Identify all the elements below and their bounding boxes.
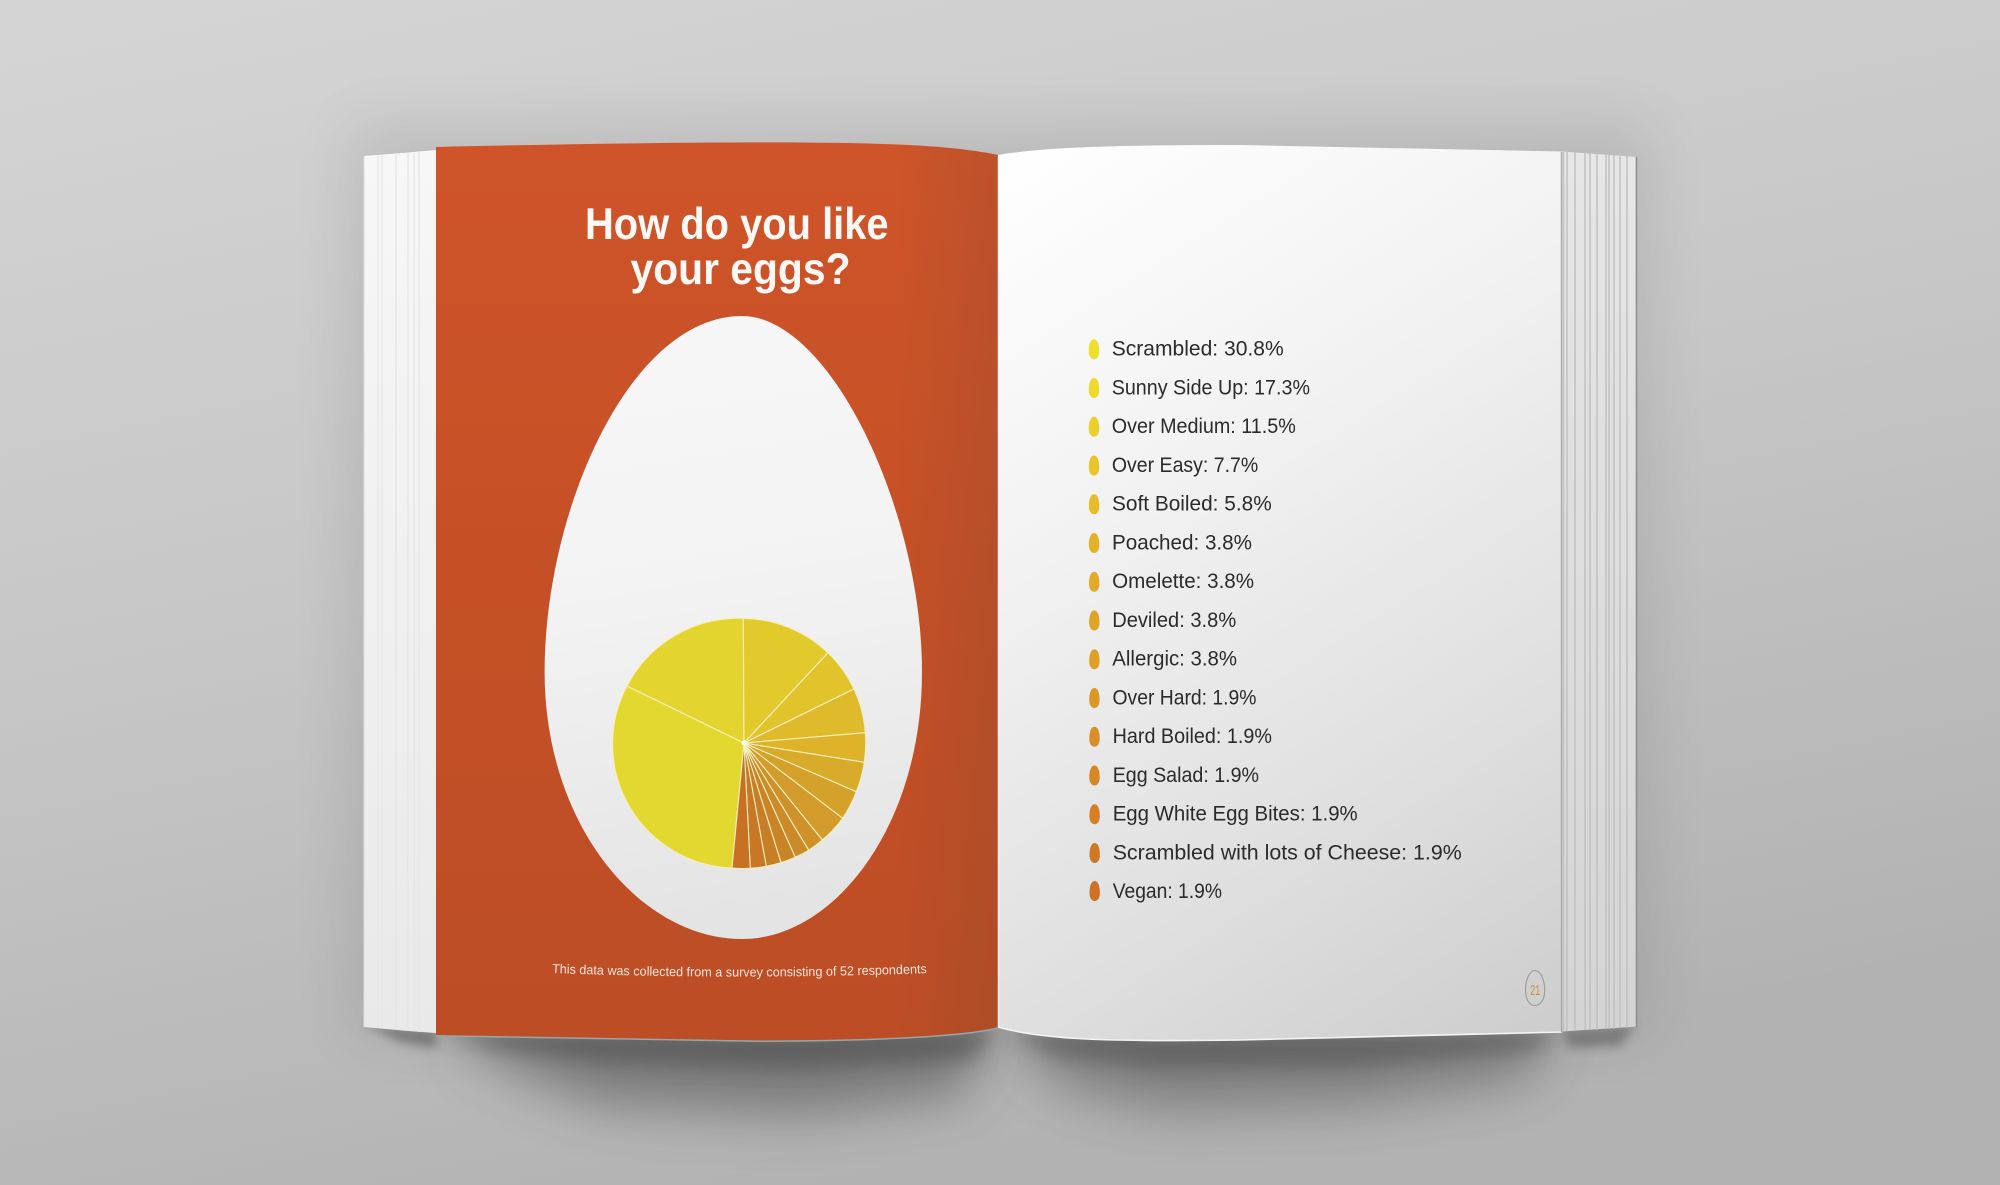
page number: 21 (1530, 982, 1540, 999)
left page stack (364, 150, 436, 1033)
title: your eggs? (630, 245, 850, 294)
legend item: Poached: Poached: 3.8% (1112, 530, 1252, 554)
title (585, 200, 889, 294)
left orange page (436, 142, 1000, 1042)
legend item: Omelette: Omelette: 3.8% (1112, 569, 1254, 593)
legend item: Allergic: Allergic: 3.8% (1112, 647, 1237, 671)
legend item: Egg White Egg Bites: Egg White Egg Bites: 1.9% (1113, 802, 1358, 826)
legend item: Hard Boiled: Hard Boiled: 1.9% (1113, 724, 1272, 748)
page number (1526, 970, 1545, 1006)
legend item: Over Easy: Over Easy: 7.7% (1112, 453, 1258, 477)
legend (1089, 337, 1462, 903)
legend item: Egg Salad: Egg Salad: 1.9% (1113, 763, 1259, 787)
legend item: Soft Boiled: Soft Boiled: 5.8% (1112, 492, 1272, 516)
egg white (545, 316, 922, 939)
legend item: Deviled: Deviled: 3.8% (1112, 608, 1236, 632)
legend item: Scrambled with lots of Cheese: Scrambled with lots of Cheese: 1.9% (1113, 840, 1462, 864)
right page (998, 145, 1562, 1041)
title: How do you like (585, 200, 889, 249)
pie chart: yolk (613, 618, 866, 868)
legend item: Scrambled: Scrambled: 30.8% (1112, 337, 1284, 361)
book drop shadows (350, 125, 1650, 1115)
survey caption: This data was collected from a survey consisting of 52 respondents (552, 964, 926, 980)
legend item: Over Hard: Over Hard: 1.9% (1112, 685, 1256, 709)
right page stack (1562, 152, 1637, 1032)
legend item: Vegan: Vegan: 1.9% (1113, 879, 1222, 903)
legend item: Sunny Side Up: Sunny Side Up: 17.3% (1112, 375, 1310, 399)
legend item: Over Medium: Over Medium: 11.5% (1112, 414, 1296, 438)
